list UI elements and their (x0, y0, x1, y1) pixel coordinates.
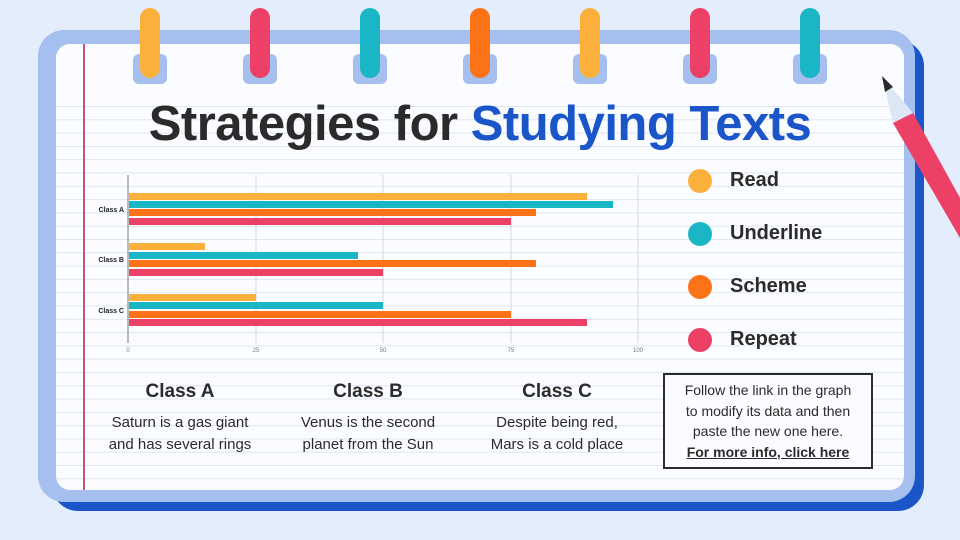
text: Class C (491, 381, 623, 453)
legend: Scheme (730, 275, 807, 297)
bar chart: Class A (99, 207, 124, 214)
text: Class C: Mars is a cold place (491, 436, 623, 453)
text: Class A (109, 381, 251, 453)
title: Strategies for Studying Texts (149, 97, 811, 151)
bar chart (98, 175, 644, 354)
bar chart: Class C (98, 308, 124, 315)
icon: pencil (882, 76, 960, 238)
bar chart: 75 (508, 348, 515, 354)
rings (133, 8, 827, 84)
text: Class A: Saturn is a gas giant (112, 414, 248, 431)
bar chart: 25 (253, 348, 260, 354)
bar chart: Class B (98, 257, 124, 264)
text: Class B: Venus is the second (301, 414, 435, 431)
legend: Read (730, 169, 779, 191)
callout box (663, 373, 873, 469)
text: Class B: planet from the Sun (303, 436, 433, 453)
callout box: paste the new one here. (693, 423, 843, 439)
bar chart: 0 (126, 348, 130, 354)
legend (688, 169, 822, 352)
legend: Repeat (730, 328, 797, 350)
bar chart: 100 (633, 348, 644, 354)
text: Class B: Class B (333, 381, 403, 402)
text: Class C: Despite being red, (496, 414, 618, 431)
callout box: to modify its data and then (686, 402, 850, 418)
text: Class B (301, 381, 435, 453)
legend: Underline (730, 222, 822, 244)
text: Class C: Class C (522, 381, 592, 402)
callout box: Follow the link in the graph (685, 382, 851, 398)
bar chart: 50 (380, 348, 387, 354)
text: Class A: and has several rings (109, 436, 251, 453)
text: Class A: Class A (146, 381, 214, 402)
callout box: For more info, click here (687, 444, 849, 460)
